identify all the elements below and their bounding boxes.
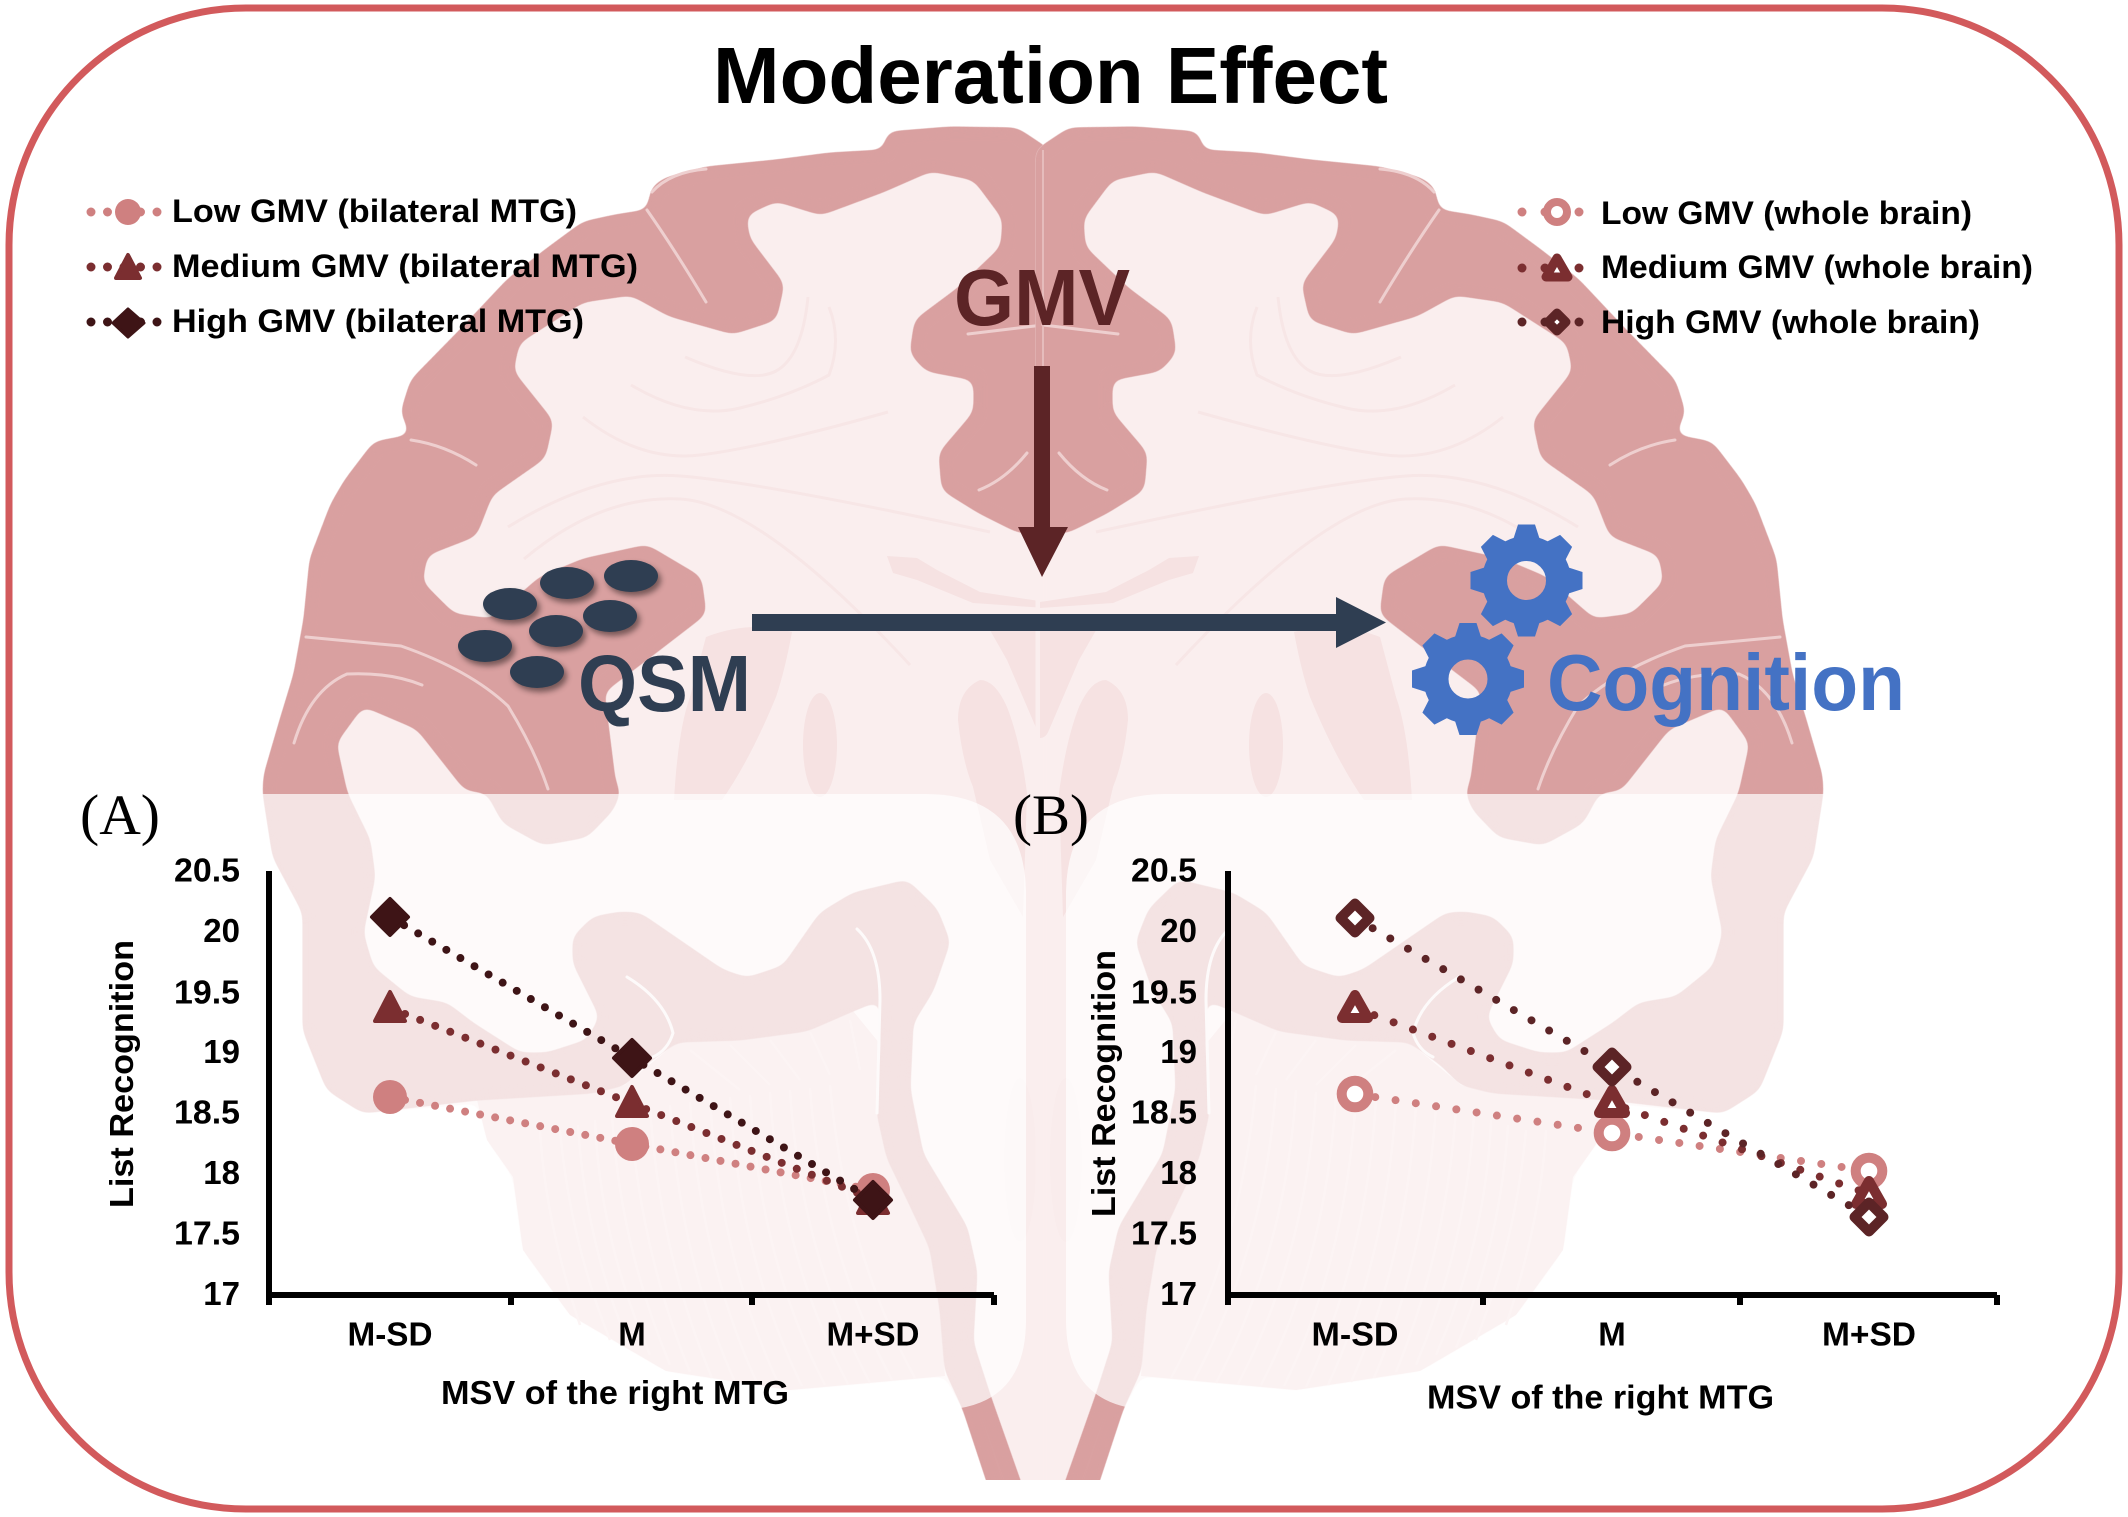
y tick labels A: 18 — [203, 1154, 240, 1191]
legend: whole brain — [1518, 195, 2033, 340]
y tick labels A — [174, 852, 240, 1312]
chart B: whole brain — [1085, 852, 1997, 1416]
y tick labels B: 20 — [1160, 912, 1197, 949]
x tick labels B: M — [1598, 1316, 1626, 1352]
y axis title A: List Recognition — [103, 940, 140, 1208]
y tick labels A: 18.5 — [174, 1094, 240, 1130]
y tick labels B: 19 — [1160, 1033, 1197, 1070]
axes B — [1228, 871, 1997, 1305]
Cognition label: Cognition — [1547, 638, 1905, 727]
y tick labels A: 20.5 — [174, 852, 240, 888]
series: medium GMV bilateral — [375, 992, 888, 1213]
legend item: high GMV whole brain: High GMV (whole brain) — [1601, 304, 1980, 340]
title: Moderation Effect — [713, 31, 1388, 120]
y axis title B: List Recognition — [1085, 950, 1122, 1217]
y tick labels B: 17.5 — [1131, 1214, 1197, 1252]
y tick labels B — [1131, 852, 1197, 1312]
series: medium GMV whole brain — [1342, 995, 1882, 1204]
y tick labels A: 19.5 — [174, 974, 240, 1010]
legend item: low GMV bilateral: Low GMV (bilateral MTG) — [172, 193, 577, 229]
arrow: QSM to cognition — [752, 597, 1386, 648]
x tick labels B: M-SD — [1312, 1316, 1398, 1352]
x tick labels B — [1312, 1316, 1916, 1352]
chart A: bilateral MTG — [103, 852, 994, 1411]
axes A — [269, 871, 994, 1305]
y tick labels A: 17 — [203, 1275, 240, 1312]
x tick labels A: M — [618, 1316, 646, 1352]
y tick labels B: 18 — [1160, 1154, 1197, 1191]
series: high GMV bilateral — [372, 899, 891, 1218]
y tick labels A: 19 — [203, 1033, 240, 1070]
icon: upper gear — [1470, 524, 1582, 636]
panel label B: (B) — [1013, 784, 1089, 847]
series: high GMV whole brain — [1340, 904, 1884, 1232]
y tick labels B: 20.5 — [1131, 852, 1197, 888]
series: low GMV whole brain — [1342, 1081, 1882, 1184]
x tick labels A — [348, 1316, 920, 1352]
series: low GMV bilateral — [373, 1080, 890, 1207]
x tick labels B: M+SD — [1822, 1316, 1916, 1352]
y tick labels A: 20 — [203, 912, 240, 949]
panel label A: (A) — [80, 784, 160, 847]
legend item: low GMV whole brain: Low GMV (whole brain) — [1601, 195, 1972, 231]
y tick labels A: 17.5 — [174, 1214, 240, 1252]
icon: lower gear — [1412, 623, 1524, 735]
GMV label: GMV — [954, 253, 1130, 342]
x tick labels A: M-SD — [348, 1316, 432, 1352]
x tick labels A: M+SD — [826, 1316, 920, 1352]
legend item: high GMV bilateral: High GMV (bilateral MTG) — [172, 303, 584, 339]
y tick labels B: 17 — [1160, 1275, 1197, 1312]
x axis title A: MSV of the right MTG — [441, 1374, 789, 1411]
arrow: GMV down to path — [1018, 366, 1068, 577]
y tick labels B: 19.5 — [1131, 974, 1197, 1010]
legend: bilateral MTG — [91, 193, 638, 339]
icon: QSM iron deposits — [458, 560, 658, 688]
legend item: medium GMV whole brain: Medium GMV (whole brain) — [1601, 249, 2033, 285]
brain illustration — [262, 127, 1824, 1500]
y tick labels B: 18.5 — [1131, 1094, 1197, 1130]
x axis title B: MSV of the right MTG — [1427, 1378, 1774, 1416]
legend item: medium GMV bilateral: Medium GMV (bilateral MTG) — [172, 248, 638, 284]
QSM label: QSM — [578, 639, 751, 728]
